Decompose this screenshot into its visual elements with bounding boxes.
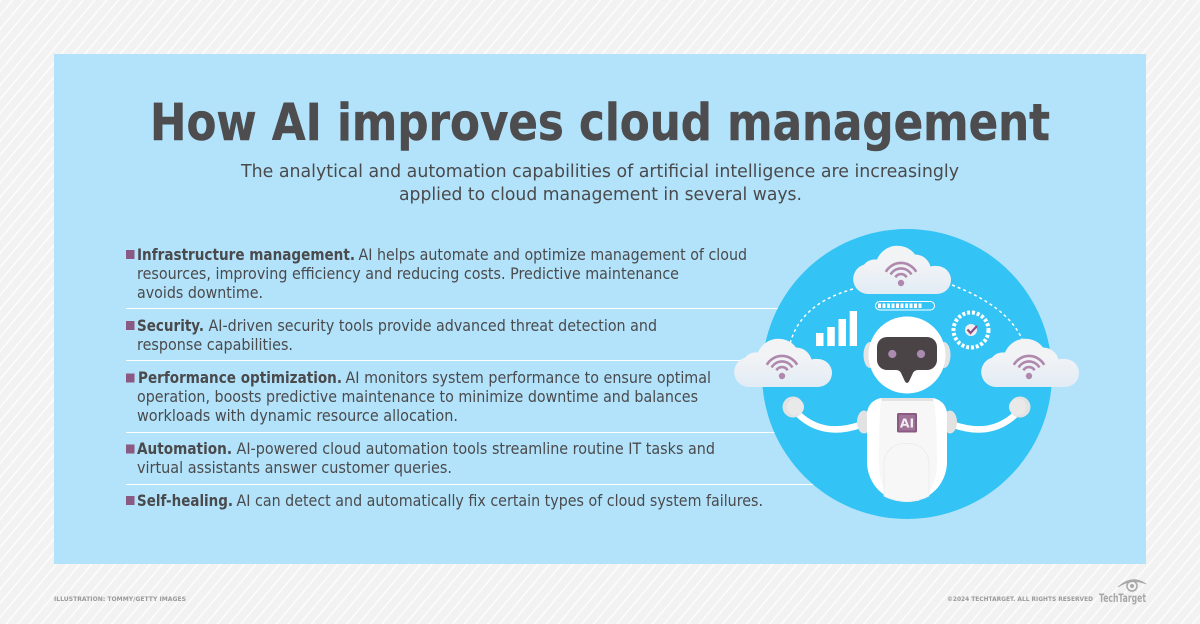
title: How AI improves cloud management	[150, 94, 1050, 153]
dividers	[126, 308, 820, 484]
robot eyes	[888, 350, 925, 358]
dashed connection arcs	[790, 285, 1022, 344]
robot face screen	[877, 337, 937, 383]
logo: TechTarget	[1099, 580, 1146, 605]
progress bar	[876, 302, 934, 310]
subtitle: applied to cloud management in several ways.	[399, 184, 802, 205]
AI badge: AI	[900, 416, 914, 430]
list item: security: response capabilities.	[137, 335, 293, 354]
list item: performance optimization: workloads with dynamic resource allocation.	[137, 406, 458, 425]
list item: security	[126, 316, 657, 354]
AI badge	[897, 413, 917, 432]
list item: automation: virtual assistants answer customer queries.	[137, 458, 452, 477]
bar chart icon	[816, 311, 857, 346]
robot shoulders	[857, 410, 957, 434]
subtitle	[240, 161, 959, 205]
logo: TechTarget: TechTarget	[1099, 591, 1146, 605]
list item: self-healing: Self-healing.	[137, 491, 233, 510]
icon: check gauge	[954, 312, 988, 348]
list item: infrastructure management: resources, improving efficiency and reducing costs. Predictive maintenance	[137, 264, 679, 283]
robot head	[868, 316, 946, 394]
illustration: robot in circle	[734, 229, 1079, 519]
list item: infrastructure management	[126, 245, 747, 302]
subtitle: The analytical and automation capabilities of artificial intelligence are increasingly	[240, 161, 959, 182]
list item: automation	[126, 439, 715, 477]
list item: automation: AI-powered cloud automation tools streamline routine IT tasks and	[236, 439, 715, 458]
panel: main light blue	[54, 54, 1146, 564]
icon: top cloud with wifi	[853, 246, 951, 294]
list item: security: Security.	[137, 316, 204, 335]
copyright: ©2024 TECHTARGET. ALL RIGHTS RESERVED	[947, 596, 1093, 603]
list item: performance optimization: operation, boosts predictive maintenance to minimize downtime and balances	[137, 387, 698, 406]
robot ears	[864, 342, 950, 368]
list item: performance optimization: AI monitors system performance to ensure optimal	[346, 368, 711, 387]
icon: right cloud with wifi	[981, 339, 1079, 387]
list item: infrastructure management: Infrastructure management.	[137, 245, 355, 264]
icon: left cloud with wifi	[734, 339, 832, 387]
list item: infrastructure management: AI helps automate and optimize management of cloud	[358, 245, 747, 264]
robot arms	[797, 413, 1017, 429]
list item: infrastructure management: avoids downtime.	[137, 283, 263, 302]
robot body	[867, 398, 947, 502]
list item: automation: Automation.	[137, 439, 232, 458]
list item: self-healing: AI can detect and automatically fix certain types of cloud system failures.	[236, 491, 763, 510]
blue circle	[762, 229, 1052, 519]
credit: illustration: ILLUSTRATION: TOMMY/GETTY IMAGES	[54, 596, 186, 603]
list item: security: AI-driven security tools provide advanced threat detection and	[208, 316, 657, 335]
robot hands	[782, 396, 1030, 418]
list item: performance optimization	[126, 368, 711, 425]
list item: performance optimization: Performance optimization.	[138, 368, 342, 387]
